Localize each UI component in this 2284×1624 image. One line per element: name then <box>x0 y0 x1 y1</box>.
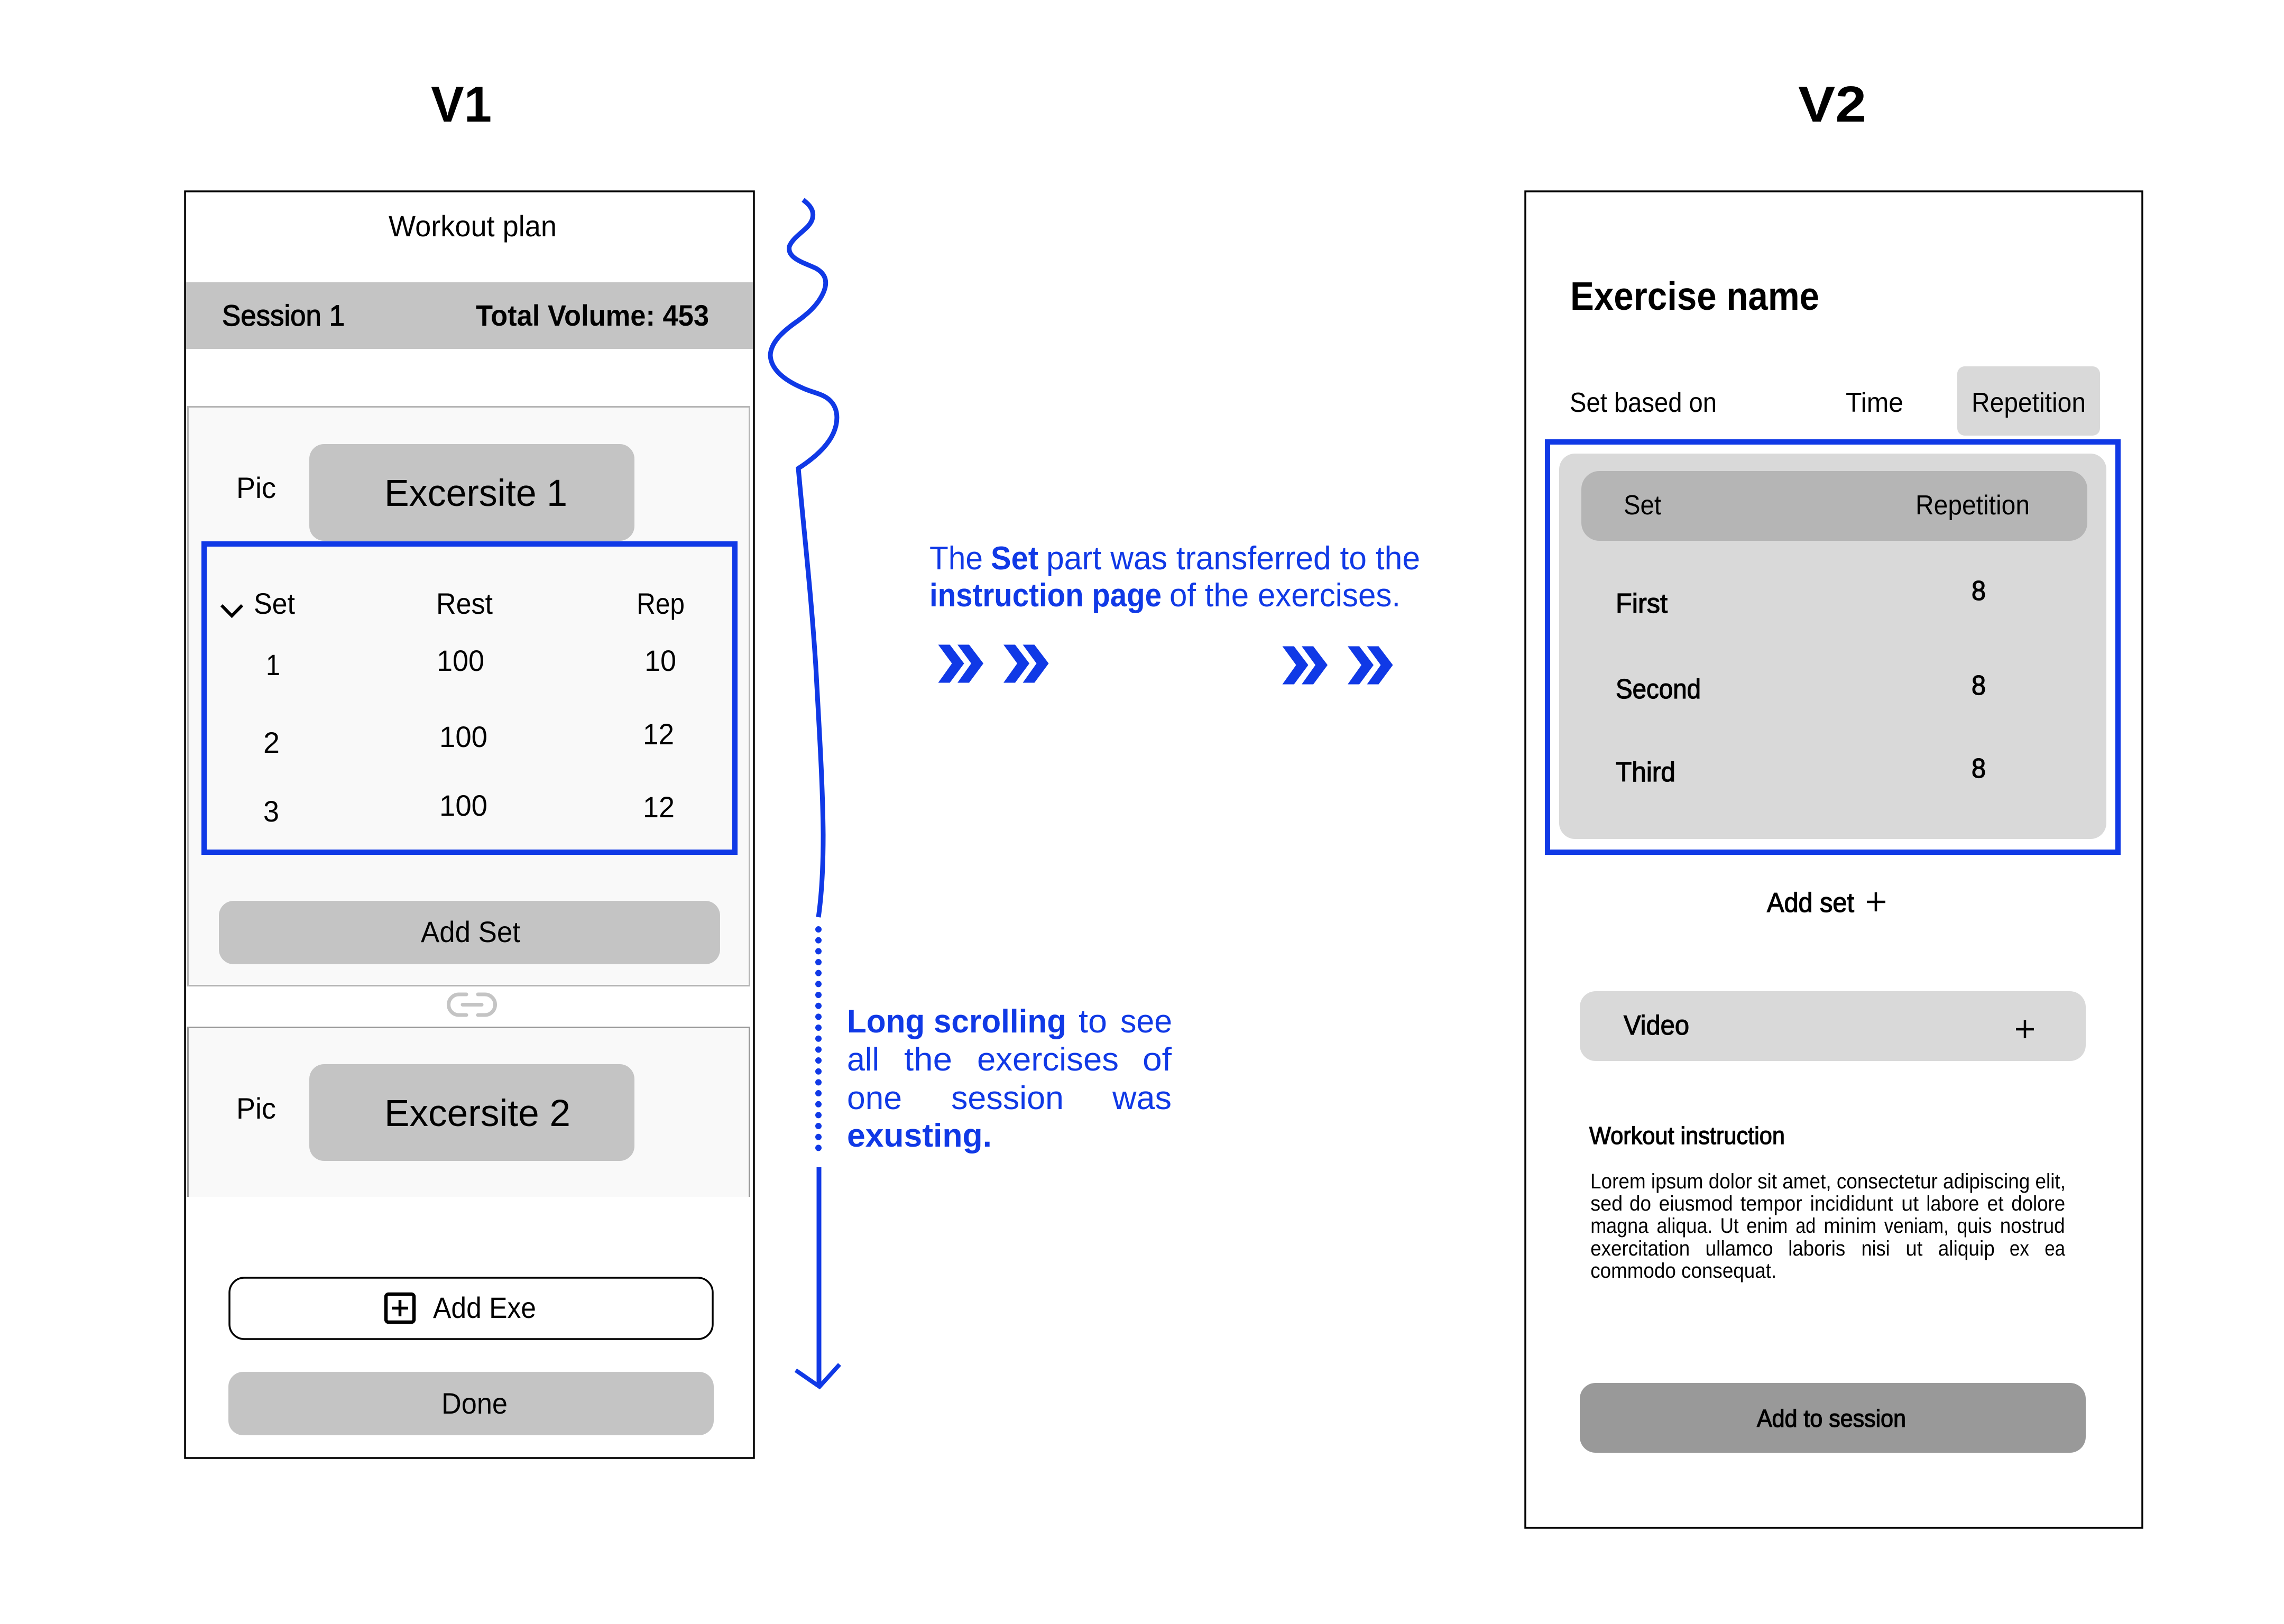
solid segment <box>816 1167 822 1385</box>
text block: lorem ipsum: ad <box>1795 1214 1816 1238</box>
card: exercise 1 <box>188 407 750 985</box>
text block: lorem ipsum: commodo consequat. <box>1590 1259 1776 1282</box>
text block: lorem ipsum: ex <box>2010 1237 2029 1260</box>
gray table panel <box>1559 454 2106 839</box>
icon: plus box <box>386 1294 414 1322</box>
annotation: long scrolling: was <box>1112 1080 1172 1116</box>
button: Video <box>1580 991 2086 1061</box>
set based on row: Repetition <box>1972 387 2086 418</box>
button: Excersite 2: Excersite 2 <box>384 1093 570 1134</box>
text block: lorem ipsum: tempor <box>1740 1192 1802 1215</box>
text block: lorem ipsum: quis <box>1957 1214 1992 1238</box>
text block: lorem ipsum: sed <box>1590 1192 1623 1215</box>
button: Add Set: Add Set <box>421 915 520 948</box>
button: Add Exe: Add Exe <box>433 1291 536 1324</box>
text block: lorem ipsum: dolore <box>2011 1192 2065 1215</box>
table row 2 <box>263 717 674 759</box>
button: Video: Video <box>1624 1010 1689 1041</box>
table header <box>1581 471 2087 541</box>
table row 3: 100 <box>439 789 487 822</box>
table header: Set <box>254 587 295 620</box>
text block: lorem ipsum: incididunt <box>1810 1192 1893 1215</box>
table header <box>254 587 685 620</box>
table header: Rest <box>436 587 493 620</box>
set based on row: Set based on <box>1570 387 1717 418</box>
text block: lorem ipsum: nisi <box>1862 1237 1890 1260</box>
button: Excersite 1: Excersite 1 <box>384 473 567 514</box>
icon: double chevrons <box>938 645 1393 684</box>
text block: lorem ipsum: laboris <box>1788 1237 1845 1260</box>
heading: Exercise name: Exercise name <box>1570 274 1819 318</box>
text block: lorem ipsum: veniam, <box>1884 1214 1949 1238</box>
table row 1: 10 <box>644 644 676 677</box>
button: Done: Done <box>441 1387 508 1420</box>
title: V2: V2 <box>1798 76 1866 133</box>
text block: lorem ipsum: do <box>1629 1192 1651 1215</box>
text block: lorem ipsum: nostrud <box>2000 1214 2065 1238</box>
table header: Repetition <box>1915 490 2030 521</box>
dotted segment <box>815 929 822 1148</box>
button: Excersite 2 <box>309 1064 634 1161</box>
annotation: set part transferred <box>929 540 1420 614</box>
text block: lorem ipsum: aliqua. <box>1656 1214 1712 1238</box>
table row 2: 100 <box>439 720 487 753</box>
row: Third: Third <box>1616 757 1675 788</box>
table row 1: 1 <box>266 648 280 681</box>
table header: Rep <box>637 587 685 620</box>
text block: lorem ipsum: eiusmod <box>1659 1192 1733 1215</box>
highlight box: set table <box>1548 442 2118 852</box>
icon: chevron down <box>222 605 242 616</box>
arrow: long scrolling path <box>770 200 840 1387</box>
row: Second: Second <box>1616 674 1701 705</box>
button: Done <box>228 1372 714 1435</box>
highlight box: set table <box>204 544 735 852</box>
table row 3: 3 <box>263 795 279 828</box>
panel: V1 workout plan screen <box>185 191 754 1458</box>
table row 2: 12 <box>643 717 674 751</box>
button: Add to session: Add to session <box>1757 1405 1906 1432</box>
table row 1: 100 <box>437 644 484 677</box>
arrow head <box>796 1364 840 1387</box>
annotation: long scrolling: to <box>1079 1003 1107 1040</box>
panel: V2 exercise screen <box>1525 191 2142 1528</box>
row: Third <box>1616 753 1986 788</box>
set based on row <box>1570 366 2100 436</box>
annotation: long scrolling: the <box>904 1041 952 1078</box>
text block: lorem ipsum: aliquip <box>1938 1237 1995 1260</box>
row: Second <box>1616 670 1986 705</box>
annotation: set part transferred: part was transferred to the <box>1046 540 1420 577</box>
annotation: long scrolling <box>847 1003 1172 1154</box>
annotation: long scrolling: one <box>847 1080 902 1116</box>
row: First: 8 <box>1972 576 1986 606</box>
label: Pic: Pic <box>236 471 276 504</box>
screen heading: Workout plan: Workout plan <box>389 209 557 243</box>
icon: link <box>448 994 495 1015</box>
set based on row: Time <box>1846 387 1903 418</box>
text block: lorem ipsum: exercitation <box>1590 1237 1690 1260</box>
squiggle and long curve <box>770 200 837 917</box>
button: Add Set <box>219 901 720 964</box>
annotation: set part transferred: Set <box>991 540 1038 577</box>
table row 2: 2 <box>263 726 280 759</box>
row: First <box>1616 576 1986 619</box>
row: Third: 8 <box>1972 753 1986 784</box>
text block: lorem ipsum: minim <box>1823 1214 1876 1238</box>
label: Pic: Pic <box>236 1092 276 1125</box>
annotation: long scrolling: see <box>1120 1003 1172 1040</box>
table row 1 <box>266 644 676 681</box>
text block: lorem ipsum: enim <box>1746 1214 1788 1238</box>
session bar: Session 1 <box>222 299 345 332</box>
text block: lorem ipsum <box>1590 1170 2066 1282</box>
annotation: set part transferred: instruction page <box>929 577 1162 614</box>
text block: lorem ipsum: labore <box>1926 1192 1979 1215</box>
action: Add set: Add set <box>1767 888 1855 918</box>
heading: Workout instruction: Workout instruction <box>1589 1122 1785 1149</box>
annotation: long scrolling: of <box>1143 1041 1172 1078</box>
row: Second: 8 <box>1972 670 1986 701</box>
table row 3: 12 <box>643 790 675 824</box>
session bar: Total Volume: 453 <box>476 299 709 332</box>
button: Add Exe <box>229 1278 713 1339</box>
annotation: long scrolling: exusting. <box>847 1118 992 1154</box>
text block: lorem ipsum: Lorem ipsum dolor sit amet, consectetur adipiscing elit, <box>1590 1170 2066 1193</box>
table row 3 <box>263 789 675 828</box>
annotation: set part transferred: The <box>929 540 983 577</box>
text block: lorem ipsum: et <box>1987 1192 2004 1215</box>
text block: lorem ipsum: Ut <box>1720 1214 1739 1238</box>
button: Add to session <box>1580 1383 2086 1453</box>
annotation: long scrolling: Long scrolling <box>847 1003 1066 1040</box>
button: Excersite 1 <box>309 444 634 541</box>
title: V1: V1 <box>431 76 492 133</box>
text block: lorem ipsum: ut <box>1901 1192 1919 1215</box>
table header: Set <box>1624 490 1661 521</box>
card: exercise 2 <box>188 1028 750 1197</box>
annotation: set part transferred: of the exercises. <box>1169 577 1401 614</box>
row: First: First <box>1616 588 1668 619</box>
annotation: long scrolling: session <box>951 1080 1064 1116</box>
text block: lorem ipsum: ullamco <box>1706 1237 1773 1260</box>
text block: lorem ipsum: ea <box>2044 1237 2066 1260</box>
annotation: long scrolling: all <box>847 1041 879 1078</box>
text block: lorem ipsum: ut <box>1905 1237 1922 1260</box>
session bar <box>186 282 753 349</box>
text block: lorem ipsum: magna <box>1590 1214 1649 1238</box>
annotation: long scrolling: exercises <box>977 1041 1119 1078</box>
